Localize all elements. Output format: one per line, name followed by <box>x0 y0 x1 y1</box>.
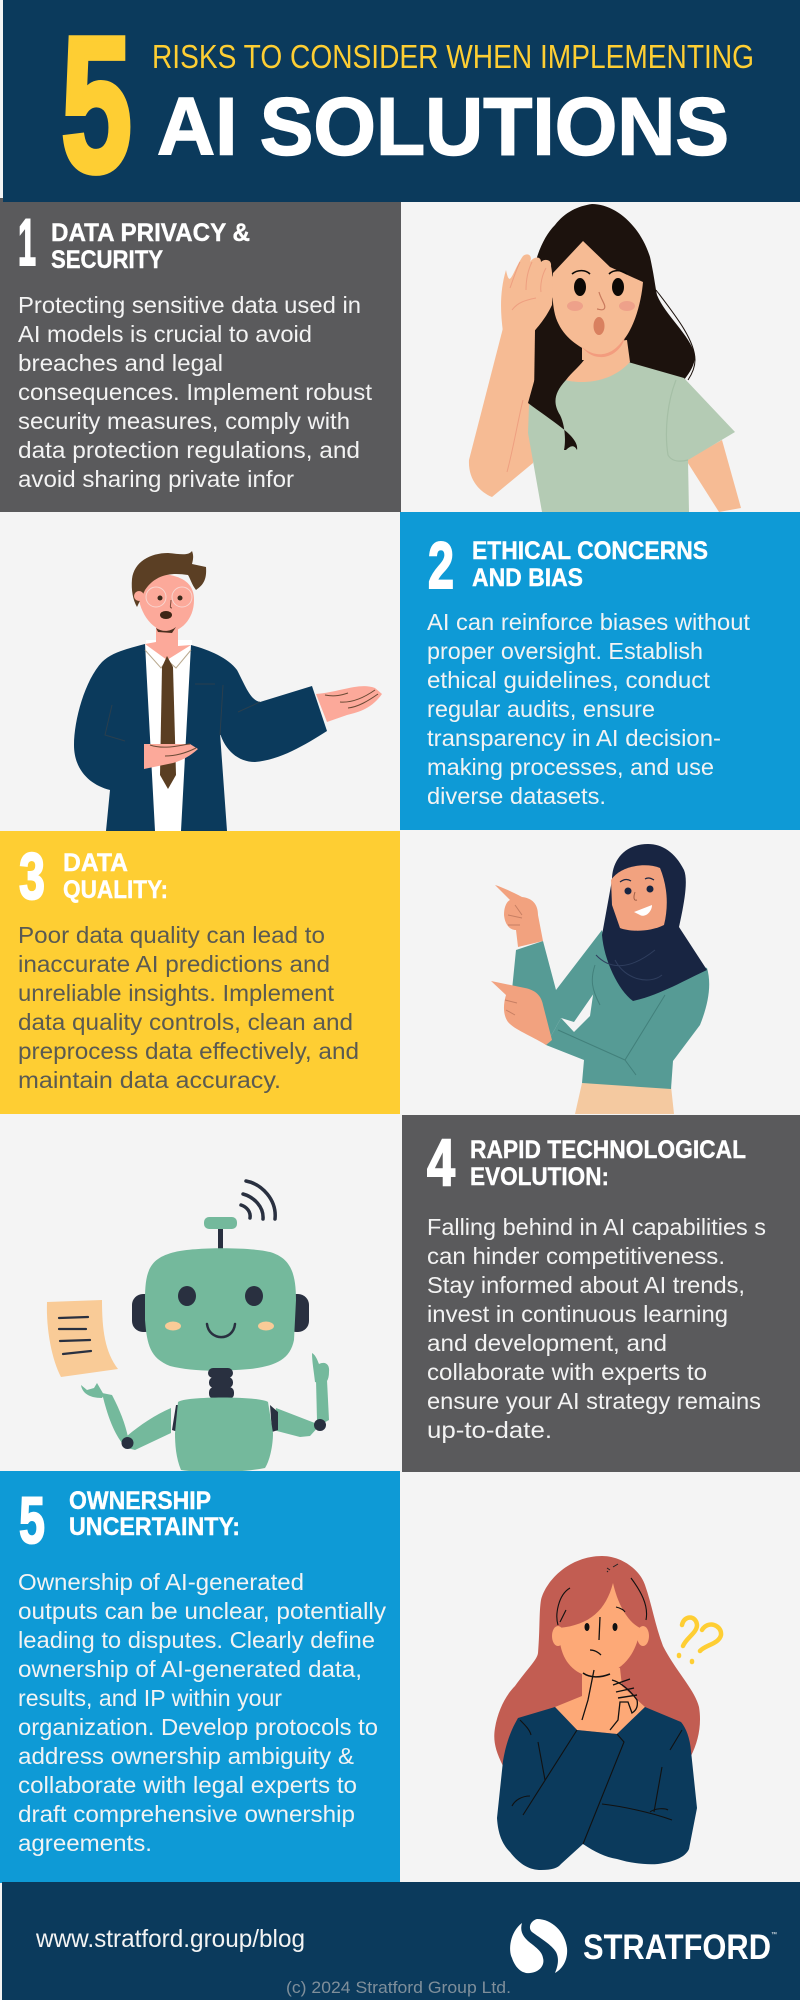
body text 5: Ownership of AI-generated <box>18 1569 304 1595</box>
heading 4: EVOLUTION: <box>470 1163 609 1191</box>
note <box>47 1300 118 1377</box>
body text 1: security measures, comply with <box>18 408 350 434</box>
heading 1: SECURITY <box>51 246 163 274</box>
body text 4: invest in continuous learning <box>427 1301 728 1327</box>
body text 3: inaccurate AI predictions and <box>18 951 330 977</box>
arms <box>81 1353 329 1450</box>
body text 4: can hinder competitiveness. <box>427 1243 725 1269</box>
heading 1: DATA PRIVACY & <box>51 219 250 247</box>
neck <box>208 1368 234 1399</box>
body text 3 <box>18 922 359 1093</box>
body text 1: data protection regulations, and <box>18 437 360 463</box>
number 4: 4 <box>427 1125 455 1199</box>
body text 3: data quality controls, clean and <box>18 1009 353 1035</box>
heading 4: RAPID TECHNOLOGICAL <box>470 1136 746 1164</box>
body text 1: avoid sharing private infor <box>18 466 294 492</box>
heading 3: DATA <box>63 849 128 877</box>
number 2: 2 <box>428 528 454 602</box>
body text 4 <box>427 1214 766 1443</box>
body text 5: address ownership ambiguity & <box>18 1743 354 1769</box>
heading 5: OWNERSHIP <box>69 1487 211 1515</box>
body text 1: breaches and legal <box>18 350 223 376</box>
body text 3: Poor data quality can lead to <box>18 922 325 948</box>
robot head <box>145 1248 296 1371</box>
illustration: robot with note <box>47 1181 329 1472</box>
body text 5: outputs can be unclear, potentially <box>18 1598 386 1624</box>
heading 5 <box>69 1487 240 1541</box>
body text 4: Falling behind in AI capabilities s <box>427 1214 766 1240</box>
body text 2: transparency in AI decision- <box>427 725 721 751</box>
body text 2: ethical guidelines, conduct <box>427 667 710 693</box>
body text 3: maintain data accuracy. <box>18 1067 281 1093</box>
heading 3 <box>63 849 168 904</box>
illustration: confused woman <box>494 1556 721 1870</box>
torso <box>175 1398 273 1472</box>
heading 3: QUALITY: <box>63 876 168 904</box>
heading 2 <box>472 537 708 592</box>
panel 1: data privacy and security <box>0 198 401 512</box>
antenna <box>204 1217 237 1250</box>
panel 4: rapid technological evolution <box>402 1115 800 1472</box>
illustration: woman in hijab pointing <box>491 844 709 1114</box>
illustration: woman listening <box>469 204 741 512</box>
header banner <box>3 0 800 212</box>
body text 5: leading to disputes. Clearly define <box>18 1627 375 1653</box>
illustration: man in suit presenting <box>74 551 382 831</box>
logo mark <box>510 1919 567 1973</box>
heading 1 <box>51 219 250 274</box>
big number 5: 5 <box>61 0 132 212</box>
body text 1: Protecting sensitive data used in <box>18 292 361 318</box>
body text 5: ownership of AI-generated data, <box>18 1656 362 1682</box>
body text 4: and development, and <box>427 1330 667 1356</box>
body text 4: collaborate with experts to <box>427 1359 707 1385</box>
body text 1: AI models is crucial to avoid <box>18 321 312 347</box>
copyright: (c) 2024 Stratford Group Ltd. <box>286 1978 511 1997</box>
heading 4 <box>470 1136 746 1191</box>
body text 5 <box>18 1569 386 1856</box>
question marks <box>679 1618 721 1662</box>
body text 2: diverse datasets. <box>427 783 606 809</box>
panel 2: ethical concerns and bias <box>400 512 800 830</box>
body text 1: consequences. Implement robust <box>18 379 372 405</box>
trademark: ™ <box>771 1931 777 1938</box>
body text 4: Stay informed about AI trends, <box>427 1272 745 1298</box>
ears <box>132 1294 309 1332</box>
number 3: 3 <box>19 839 45 913</box>
panel 5: ownership uncertainty <box>0 1471 400 1883</box>
body text 4: up-to-date. <box>427 1417 552 1443</box>
body text 2: making processes, and use <box>427 754 714 780</box>
body text 3: preprocess data effectively, and <box>18 1038 359 1064</box>
body text 2 <box>427 609 750 809</box>
body text 5: agreements. <box>18 1830 152 1856</box>
body text 1 <box>18 292 372 492</box>
wifi signal <box>241 1181 275 1219</box>
heading 5: UNCERTAINTY: <box>69 1513 240 1541</box>
heading 2: ETHICAL CONCERNS <box>472 537 708 565</box>
logo wordmark: STRATFORD <box>583 1928 771 1967</box>
title: AI SOLUTIONS <box>157 82 729 172</box>
body text 5: draft comprehensive ownership <box>18 1801 355 1827</box>
heading 2: AND BIAS <box>472 564 583 592</box>
body text 5: results, and IP within your <box>18 1685 282 1711</box>
website url: www.stratford.group/blog <box>35 1925 305 1953</box>
number 5: 5 <box>19 1483 45 1557</box>
body text 2: regular audits, ensure <box>427 696 655 722</box>
panel 3: data quality <box>0 831 400 1114</box>
body text 2: proper oversight. Establish <box>427 638 703 664</box>
body text 4: ensure your AI strategy remains <box>427 1388 761 1414</box>
body text 5: organization. Develop protocols to <box>18 1714 378 1740</box>
panel 1: data privacy and security: 1 <box>18 205 36 279</box>
body text 2: AI can reinforce biases without <box>427 609 750 635</box>
footer <box>2 1882 800 2000</box>
body text 5: collaborate with legal experts to <box>18 1772 357 1798</box>
body text 3: unreliable insights. Implement <box>18 980 334 1006</box>
